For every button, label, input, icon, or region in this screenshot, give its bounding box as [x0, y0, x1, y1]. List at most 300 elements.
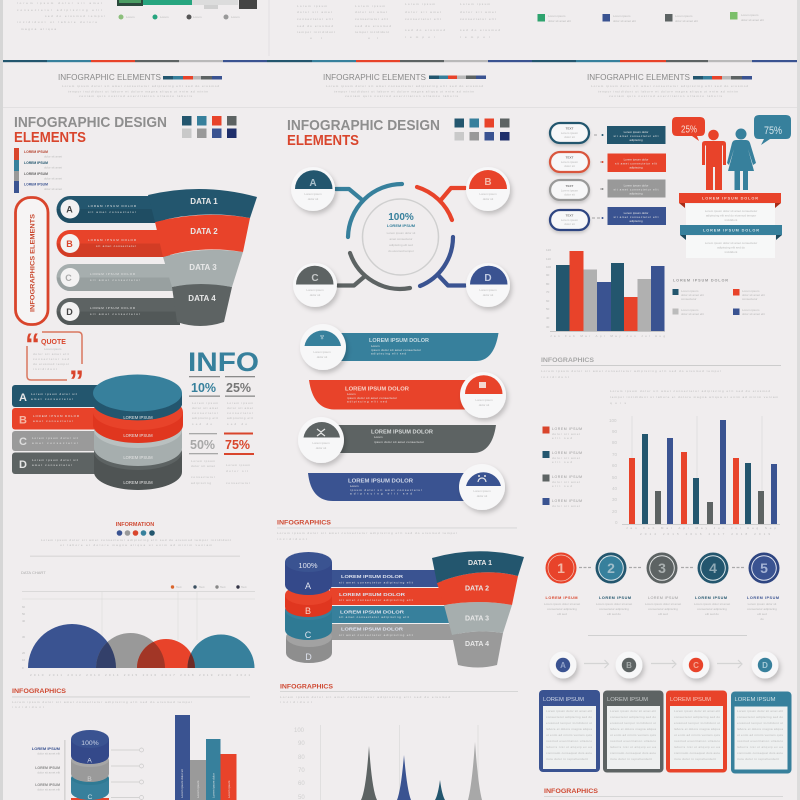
- dome chart: 20: [22, 651, 26, 655]
- centre circle: do eiusmod tempor: [388, 249, 414, 253]
- top centre cropped text columns: tempor: [405, 35, 435, 39]
- bar chart 2 legend: elit sed: [552, 436, 572, 440]
- funnel labels: DATA 2: [190, 227, 218, 236]
- centre circle: [362, 199, 438, 275]
- top right legend: Lorem ipsum: [548, 14, 566, 18]
- step captions: Lorem ipsum dolor sit amet: [596, 602, 632, 606]
- data bars A-D: sit amet consectetur: [90, 312, 140, 316]
- speech bubble 75%: 75%: [764, 125, 782, 137]
- key list: [14, 148, 62, 193]
- bar chart 2: 0: [615, 520, 618, 525]
- tall bars: Lorem ipsum: [227, 780, 231, 798]
- dome chart: 2010 2011 2012 2013 2014 2015 2016 2017 2018 2019 2020 2021: [30, 673, 250, 677]
- section title: infographics centre: INFOGRAPHICS: [277, 520, 331, 526]
- step captions: do: [760, 617, 764, 621]
- ribbon 3: Lorem ipsum: [312, 441, 330, 445]
- bar chart 1: 30: [546, 325, 550, 329]
- speech bubble 25%: [672, 117, 705, 141]
- ribbon 4: ipsum dolor sit amet consectetur: [350, 488, 422, 492]
- bar chart 1 legend: Lorem ipsum: [681, 289, 699, 293]
- heading: left: INFOGRAPHIC DESIGN: [14, 115, 167, 131]
- ribbon 1: Lorem ipsum: [313, 350, 331, 354]
- node C: dolor sit: [310, 293, 320, 297]
- node D: Lorem ipsum: [479, 288, 497, 292]
- section title: infographics right: INFOGRAPHICS: [541, 357, 594, 364]
- node A: A: [309, 178, 317, 189]
- step captions: LOREM IPSUM: [599, 596, 631, 600]
- right: pill list: dolor sit: [564, 192, 575, 196]
- top right legend: dolor sit amet elit: [741, 18, 764, 22]
- info stats: 75%: [225, 438, 250, 452]
- information heading: INFORMATION: [116, 522, 154, 528]
- section header centre: [323, 73, 486, 98]
- card: grey: commodo consequat duis aute: [610, 751, 656, 755]
- card: red: irure dolor in reprehenderit: [674, 757, 716, 761]
- card: blue: eiusmod tempor incididunt ut: [546, 721, 592, 725]
- info stats: sed do: [192, 422, 212, 426]
- section title: infographics right: incididunt: [541, 375, 569, 379]
- step captions: LOREM IPSUM: [546, 596, 578, 600]
- section title: infographics lower left: Lorem ipsum dolor sit amet consectetur adipiscing elit sed do eiusmod tempor: [12, 700, 192, 704]
- node C: C: [311, 273, 319, 284]
- step captions: elit sed do: [607, 612, 621, 616]
- step 4: [698, 552, 728, 584]
- lower stacked cylinder: A: [305, 581, 311, 591]
- connected bars: LOREM IPSUM DOLOR: [340, 610, 405, 616]
- quote box: Lorem ipsum: [44, 347, 62, 351]
- right: pill list: dolor sit: [564, 222, 575, 226]
- info stats: [188, 347, 259, 485]
- key list: dolor sit amet: [44, 187, 62, 191]
- stack tabs A-D: Lorem ipsum dolor sit: [32, 436, 78, 440]
- card: grey: labore et dolore magna aliqua: [610, 727, 656, 731]
- lower funnel labels: DATA 1: [468, 560, 492, 567]
- dome chart: 10: [22, 658, 26, 662]
- top left cropped panel: lorem ipsum dolor sit amet: [17, 1, 102, 5]
- info stats: consectetur: [226, 481, 250, 485]
- data bars A-D: B: [66, 239, 73, 249]
- ribbon 1: adipiscing elit sed: [371, 352, 406, 356]
- top centre cropped text columns: tempor incididunt: [297, 30, 335, 34]
- vertical pill label: INFOGRAPHICS ELEMENTS: [29, 214, 36, 312]
- card: red: ut enim ad minim veniam quis: [674, 733, 720, 737]
- node steps A-D: B: [626, 661, 632, 670]
- data bars A-D: LOREM IPSUM DOLOR: [90, 306, 136, 310]
- bar chart 2 legend: [542, 426, 582, 508]
- right: pill list: Lorem ipsum: [561, 160, 579, 164]
- bar chart 2: 2014 2015 2016 2017 2018 2019: [640, 532, 770, 536]
- ribbon label panels: incididunt: [725, 250, 737, 254]
- lower funnel labels: DATA 2: [465, 586, 489, 592]
- ribbon 1: dolor sit: [317, 355, 327, 359]
- section title: infographics lower centre: [280, 684, 518, 704]
- data bars A-D: sit amet consectetur: [88, 210, 136, 214]
- stack tabs A-D: B: [19, 414, 27, 426]
- card: grey: ut enim ad minim veniam quis: [610, 733, 656, 737]
- node C: [293, 263, 337, 307]
- small stacked cylinder: A: [87, 758, 92, 764]
- ribbon 2: Lorem: [347, 392, 356, 396]
- small stacked cylinder: LOREM IPSUM: [35, 783, 60, 787]
- step captions: LOREM IPSUM: [648, 596, 678, 600]
- step 3: [646, 552, 678, 584]
- bar chart 2: 60: [612, 463, 618, 468]
- info stats: 10%: [191, 381, 216, 395]
- ribbon 1: [300, 324, 498, 370]
- node D: D: [484, 273, 492, 284]
- ribbon 2: adipiscing elit sed: [347, 400, 387, 404]
- section title: infographics centre: incididunt: [277, 537, 307, 541]
- card: red: laboris nisi ut aliquip ex ea: [674, 745, 720, 749]
- card: blue: laboris nisi ut aliquip ex ea: [546, 745, 592, 749]
- speech bubble 25%: 25%: [681, 124, 697, 136]
- card: red: labore et dolore magna aliqua: [674, 727, 720, 731]
- bar chart 2: 20: [612, 509, 618, 514]
- data bars A-D: D: [66, 307, 73, 317]
- heading: centre: ELEMENTS: [287, 133, 359, 149]
- bar chart 1: 70: [546, 290, 550, 294]
- text boxes: Lorem ipsum dolor: [624, 130, 648, 134]
- bar chart 2: 50: [612, 475, 618, 480]
- swatches: left: [182, 116, 236, 138]
- bar chart 2: [609, 416, 780, 536]
- funnel labels: [188, 197, 218, 303]
- chart legend: [171, 585, 247, 589]
- bar chart 2: 70: [612, 452, 618, 457]
- ribbon 2: LOREM IPSUM DOLOR: [345, 386, 410, 392]
- section title: infographics lower left: incididunt: [12, 705, 44, 709]
- text boxes: sit amet consectetur elit: [615, 162, 657, 166]
- section header centre: veniam quis nostrud exercitation ullamco laboris: [345, 94, 458, 98]
- top centre cropped text columns: consectetur elit: [405, 17, 441, 21]
- bar chart 2 legend: dolor sit amet: [552, 432, 580, 436]
- info stats: 50%: [190, 438, 215, 452]
- section header right: Lorem ipsum dolor sit amet consectetur adipiscing elit sed do eiusmod: [591, 84, 748, 88]
- information heading: ut labore et dolore magna aliqua ut enim ad minim veniam: [60, 543, 212, 547]
- node steps A-D: D: [762, 661, 768, 670]
- data bars A-D: LOREM IPSUM DOLOR: [88, 204, 137, 208]
- step captions: consectetur adipiscing: [648, 607, 678, 611]
- bar chart 1 legend: dolor sit amet elit: [742, 312, 765, 316]
- right: pill list: TEXT: [566, 184, 573, 188]
- step captions: [544, 596, 779, 621]
- text boxes: sit amet consectetur elit: [614, 215, 659, 219]
- text boxes: sit amet consectetur elit: [614, 188, 659, 192]
- card: teal: consectetur adipiscing sed do: [737, 715, 783, 719]
- bar chart 2 legend: LOREM IPSUM: [552, 475, 582, 479]
- top centre cropped text columns: Lorem ipsum: [297, 4, 328, 8]
- bar chart 1: Jan Feb Mar Apr May Jun Jul Aug: [550, 334, 665, 338]
- right: pill list: dolor sit: [564, 164, 575, 168]
- ribbon 4: adipiscing elit sed: [350, 492, 412, 496]
- info stats: consectetur: [227, 411, 253, 415]
- ribbon label panels: Lorem ipsum dolor sit amet consectetur: [705, 241, 757, 245]
- step 3: 3: [658, 560, 666, 576]
- info stats: consectetur: [191, 475, 215, 479]
- connected bars: LOREM IPSUM DOLOR: [341, 626, 404, 632]
- tall bars: Lorem ipsum dolor sit: [180, 769, 184, 798]
- top left cropped panel: consectetur adipiscing elit: [17, 8, 102, 12]
- step captions: elit sed: [557, 612, 567, 616]
- spike chart: 70: [298, 768, 305, 774]
- step captions: Lorem ipsum dolor sit amet: [694, 602, 730, 606]
- cylinder labels: LOREM IPSUM: [123, 415, 153, 420]
- card: blue: [539, 690, 600, 772]
- centre circle: Lorem ipsum dolor sit: [387, 231, 416, 235]
- bar chart 2: Jan Feb Mar Apr May Jun Jul Aug Sep: [626, 526, 776, 530]
- card: red: nostrud exercitation ullamco: [674, 739, 720, 743]
- bar chart 2: 80: [612, 440, 618, 445]
- top left cropped panel: [17, 0, 257, 31]
- card: red: commodo consequat duis aute: [674, 751, 720, 755]
- step captions: Lorem ipsum dolor sit: [748, 602, 776, 606]
- device legend: Lorem: [160, 15, 169, 19]
- node C: Lorem ipsum: [306, 288, 324, 292]
- top right legend: dolor sit amet elit: [613, 19, 636, 23]
- card: grey: Lorem ipsum dolor sit amet elit: [610, 709, 656, 713]
- step captions: consectetur adipiscing: [697, 607, 727, 611]
- top centre cropped text columns: dolor sit amet: [297, 10, 332, 14]
- cylinder labels: [123, 415, 153, 485]
- text boxes: Lorem ipsum dolor: [624, 158, 648, 162]
- tall bars: Lorem ipsum dolor: [212, 773, 216, 798]
- section title: infographics lower left: INFOGRAPHICS: [12, 688, 66, 695]
- key list: dolor sit amet: [44, 154, 62, 158]
- top right legend: Lorem ipsum: [741, 13, 759, 17]
- lower funnel labels: [465, 560, 492, 648]
- section header left: INFOGRAPHIC ELEMENTS: [58, 73, 161, 82]
- info stats: sed do: [227, 422, 247, 426]
- node B: B: [484, 177, 492, 188]
- dome chart: 50: [22, 612, 26, 616]
- dome chart: 60: [22, 605, 26, 609]
- key list: LOREM IPSUM: [24, 182, 48, 186]
- ribbon 2: dolor sit: [479, 403, 489, 407]
- centre circle: adipiscing elit sed: [389, 243, 413, 247]
- section header centre: INFOGRAPHIC ELEMENTS: [323, 73, 426, 82]
- centre circle: LOREM IPSUM: [387, 223, 416, 228]
- text boxes: Lorem ipsum dolor: [624, 184, 648, 188]
- small stacked cylinder: LOREM IPSUM: [32, 746, 61, 751]
- node D: dolor sit: [483, 293, 493, 297]
- ring arcs: [336, 184, 465, 289]
- step captions: LOREM IPSUM: [695, 596, 727, 600]
- bar chart 1: 110: [546, 257, 551, 261]
- ribbon 4: LOREM IPSUM DOLOR: [348, 478, 413, 484]
- icon: man: [702, 130, 726, 190]
- ribbon 2: Lorem ipsum: [475, 398, 493, 402]
- connected bars: LOREM IPSUM DOLOR: [341, 574, 404, 580]
- section header right: INFOGRAPHIC ELEMENTS: [587, 73, 690, 82]
- bar chart 1: 80: [546, 282, 550, 286]
- step 4: 4: [709, 560, 717, 576]
- bar chart 1 legend: LOREM IPSUM DOLOR: [673, 278, 728, 282]
- section title: infographics right: [541, 357, 781, 405]
- ribbon 3: ipsum dolor sit amet consectetur: [374, 440, 424, 444]
- section title: infographics centre: [277, 520, 517, 541]
- lower funnel: [432, 551, 524, 668]
- right: pill list: TEXT: [566, 214, 573, 218]
- cylinder labels: LOREM IPSUM: [123, 480, 153, 485]
- centre circle: amet consectetur: [389, 237, 413, 241]
- top centre cropped text columns: tempor incididunt: [355, 30, 389, 34]
- top centre cropped text columns: consectetur elit: [460, 17, 496, 21]
- top centre cropped text columns: ut: [368, 36, 378, 40]
- card: blue: labore et dolore magna aliqua: [546, 727, 592, 731]
- top centre cropped text columns: ut: [310, 36, 322, 40]
- chart legend: Text: [199, 585, 205, 589]
- card: teal: labore et dolore magna aliqua: [737, 727, 783, 731]
- card: blue: Lorem ipsum dolor sit amet elit: [546, 709, 592, 713]
- card: red: [666, 690, 727, 772]
- key list: LOREM IPSUM: [24, 150, 48, 154]
- node steps A-D: C: [693, 661, 699, 670]
- section header left: Lorem ipsum dolor sit amet consectetur adipiscing elit sed do eiusmod: [62, 84, 219, 88]
- section header right: veniam quis nostrud exercitation ullamco laboris: [609, 94, 722, 98]
- spike chart: 80: [298, 755, 305, 761]
- text boxes: adipiscing: [629, 138, 643, 142]
- info stats: dolor sit amet: [192, 406, 218, 410]
- bar chart 1: 40: [546, 316, 550, 320]
- bar chart 1: 100: [546, 265, 551, 269]
- bar chart 2 legend: LOREM IPSUM: [552, 499, 582, 503]
- step captions: LOREM IPSUM: [747, 596, 779, 600]
- funnel labels: DATA 1: [190, 197, 218, 206]
- card: blue: ut enim ad minim veniam quis: [546, 733, 592, 737]
- card: grey: laboris nisi ut aliquip ex ea: [610, 745, 656, 749]
- card: grey: irure dolor in reprehenderit: [610, 757, 652, 761]
- card: teal: commodo consequat duis aute: [737, 751, 783, 755]
- bar chart 2 legend: dolor sit amet: [552, 456, 580, 460]
- centre circle: 100%: [388, 212, 414, 223]
- right: pill list: dolor sit: [564, 135, 575, 139]
- bar chart 1 legend: Lorem ipsum: [681, 308, 699, 312]
- bar chart 2 legend: dolor sit amet: [552, 480, 580, 484]
- info stats: dolor sit amet: [227, 406, 253, 410]
- section header right: tempor incididunt ut labore et dolore magna aliqua ut enim ad minim: [598, 90, 738, 94]
- bar chart 1 legend: dolor sit amet elit: [681, 312, 704, 316]
- bar chart 2 legend: dolor sit amet: [552, 504, 580, 508]
- data bars A-D: LOREM IPSUM DOLOR: [88, 238, 137, 242]
- key list: dolor sit amet: [44, 166, 62, 170]
- stack tabs A-D: Lorem ipsum dolor sit: [31, 392, 77, 396]
- bar chart 2 legend: elit sed: [552, 460, 572, 464]
- node B: Lorem ipsum: [479, 192, 497, 196]
- ribbon label panels: LOREM IPSUM DOLOR: [703, 228, 759, 232]
- bar chart 2 legend: LOREM IPSUM: [552, 427, 582, 431]
- connected bars: sit amet consectetur adipiscing elit: [339, 633, 413, 637]
- card: red: LOREM IPSUM: [670, 697, 711, 703]
- heading: left: ELEMENTS: [14, 130, 86, 146]
- quote box: [25, 328, 84, 398]
- arrows: [584, 660, 742, 668]
- bar chart 1: 50: [546, 307, 550, 311]
- card: blue: LOREM IPSUM: [543, 697, 584, 703]
- section title: infographics lower left: [12, 688, 250, 709]
- top centre cropped text columns: dolor sit amet: [355, 10, 387, 14]
- node A: Lorem ipsum: [304, 192, 322, 196]
- text boxes: adipiscing: [629, 166, 643, 170]
- ribbon label panels: adipiscing elit sed do eiusmod tempor: [706, 214, 756, 218]
- step 5: 5: [760, 560, 768, 576]
- small stacked cylinder: B: [87, 776, 92, 783]
- device legend: Lorem: [126, 15, 135, 19]
- info stats: dolor sit: [226, 469, 248, 473]
- connected bars: sit amet consectetur adipiscing elit: [339, 598, 413, 602]
- cylinder labels: LOREM IPSUM: [123, 455, 153, 460]
- stacked cylinder: [93, 374, 183, 490]
- card: teal: eiusmod tempor incididunt ut: [737, 721, 783, 725]
- funnel labels: DATA 4: [188, 294, 216, 303]
- quote box: ”: [69, 365, 84, 398]
- information heading: Lorem ipsum dolor sit amet consectetur adipiscing elit sed do eiusmod tempor incididunt: [41, 538, 231, 542]
- section title: infographics centre: Lorem ipsum dolor sit amet consectetur adipiscing elit sed do eiusmod tempor: [277, 531, 457, 535]
- top centre cropped text columns: sed do eiusmod: [460, 28, 500, 32]
- lower stacked cylinder: D: [305, 652, 312, 662]
- section header centre: Lorem ipsum dolor sit amet consectetur adipiscing elit sed do eiusmod: [326, 84, 483, 88]
- data bars A-D: sit amet consectetur: [96, 244, 136, 248]
- card: teal: Lorem ipsum dolor sit amet elit: [737, 709, 783, 713]
- ribbon 4: [308, 464, 505, 510]
- connected bars: sit amet consectetur adipiscing elit: [339, 615, 409, 619]
- vertical pill label: [16, 198, 48, 324]
- top left cropped panel: sed do eiusmod tempor: [45, 14, 105, 18]
- dome chart: DATA CHART: [21, 570, 46, 575]
- top right legend: Lorem ipsum: [675, 14, 693, 18]
- icon: woman: [727, 128, 756, 190]
- ribbon 4: dolor sit: [477, 494, 487, 498]
- card: teal: nostrud exercitation ullamco: [737, 739, 783, 743]
- step 2: [596, 552, 626, 584]
- tall bars: Lorem ipsum: [196, 780, 200, 798]
- bar chart 1 legend: dolor sit amet elit: [742, 293, 765, 297]
- funnel labels: DATA 3: [189, 263, 217, 272]
- card: grey: nostrud exercitation ullamco: [610, 739, 656, 743]
- dome chart: 0: [22, 666, 24, 670]
- top centre cropped text columns: dolor sit amet: [460, 10, 496, 14]
- ribbon label panels: incididunt: [725, 218, 737, 222]
- lower stacked cylinder: [285, 552, 332, 663]
- small stacked cylinder: LOREM IPSUM: [35, 766, 60, 770]
- section title: infographics right: Lorem ipsum dolor sit amet consectetur adipiscing elit sed do eiusmod tempor: [541, 369, 721, 373]
- bar chart 2: 100: [609, 418, 617, 423]
- top centre cropped text columns: Lorem ipsum: [355, 4, 386, 8]
- text boxes: [607, 126, 666, 225]
- stack tabs A-D: Lorem ipsum dolor sit: [32, 458, 78, 462]
- top centre cropped text columns: [297, 2, 500, 40]
- section title: infographics right: Lorem ipsum dolor sit amet consectetur adipiscing elit sed do eiusmod: [610, 389, 770, 393]
- info stats: adipiscing: [191, 481, 211, 485]
- heading: left: [14, 115, 167, 146]
- node steps A-D: A: [560, 661, 566, 670]
- key list: LOREM IPSUM: [24, 161, 48, 165]
- ribbon label panels: adipiscing elit sed do: [717, 246, 745, 250]
- card: grey: eiusmod tempor incididunt ut: [610, 721, 656, 725]
- section header centre: tempor incididunt ut labore et dolore magna aliqua ut enim ad minim: [334, 90, 474, 94]
- stack tabs A-D: [12, 385, 102, 474]
- dome chart: 40: [22, 619, 26, 623]
- card: grey: consectetur adipiscing sed do: [610, 715, 656, 719]
- funnel: [148, 189, 257, 326]
- card: grey: [603, 690, 664, 772]
- node A: dolor sit: [308, 197, 318, 201]
- chart legend: Text: [220, 585, 226, 589]
- small stacked cylinder: dolor sit amet elit: [37, 770, 60, 774]
- bar chart 1: 120: [546, 248, 551, 252]
- section header left: [58, 73, 222, 98]
- cycle diagram: [291, 167, 510, 307]
- card: blue: consectetur adipiscing sed do: [546, 715, 592, 719]
